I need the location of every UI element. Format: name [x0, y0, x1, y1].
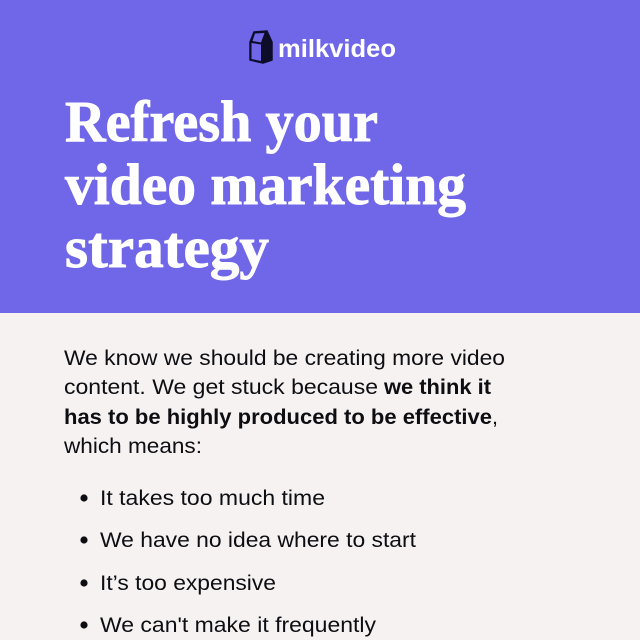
title [65, 89, 466, 280]
list item: time: It takes too much time [100, 486, 325, 510]
text block: introduction [63, 346, 505, 458]
text block: introduction: has to be highly produced to be effective [64, 405, 492, 429]
text block: introduction: we think it [383, 375, 491, 399]
list item: where to start: We have no idea where to start [100, 528, 416, 552]
text block: introduction: content. We get stuck because [64, 375, 378, 399]
icon: milk carton [250, 31, 272, 63]
title: strategy [65, 215, 269, 280]
title: Refresh your [65, 89, 378, 154]
text block: introduction: We know we should be creating more video [64, 346, 505, 370]
panel: header background [0, 0, 640, 313]
logo: milkvideo [250, 31, 396, 63]
bulleted list [80, 486, 416, 637]
title: video marketing [65, 152, 466, 217]
list item: frequency: We can't make it frequently [100, 613, 376, 637]
text block: introduction: which means: [63, 434, 202, 458]
text block: introduction: , [492, 405, 498, 429]
panel: body background [0, 313, 640, 640]
logo wordmark: milkvideo [278, 35, 396, 63]
list item: expensive: It’s too expensive [100, 571, 276, 595]
